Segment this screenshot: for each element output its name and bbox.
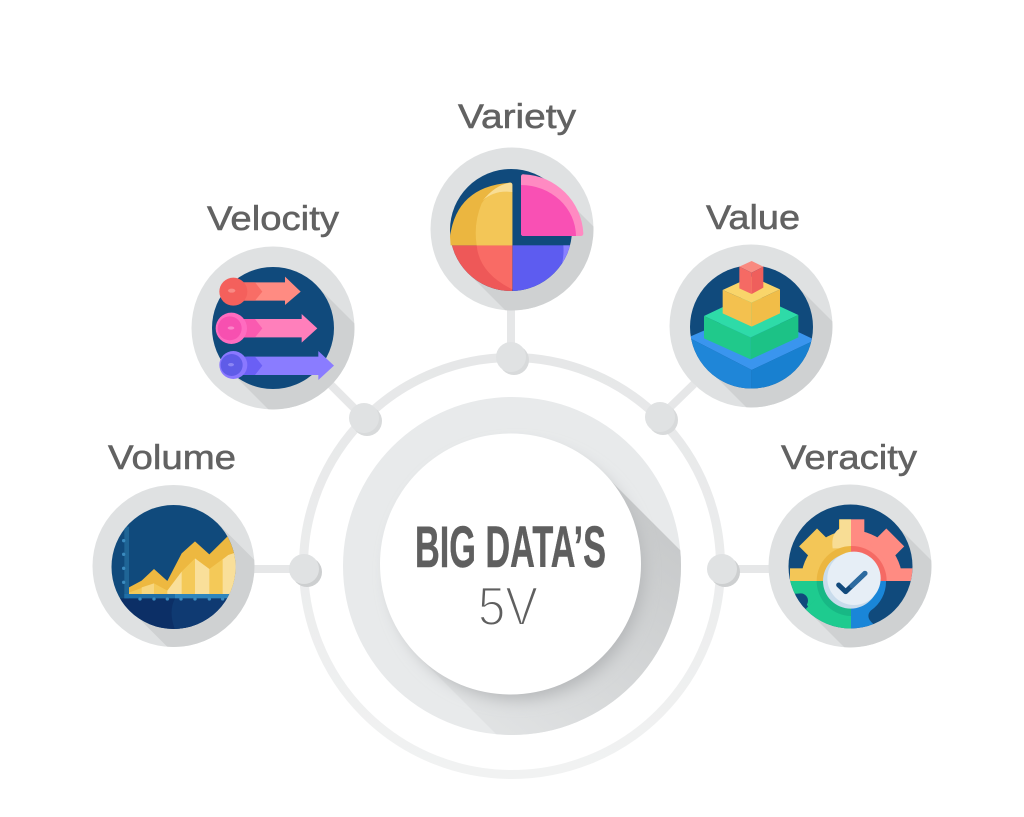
label: Veracity: Veracity	[781, 439, 917, 477]
label: Variety: Variety	[458, 98, 576, 136]
node: value	[645, 402, 678, 435]
node: variety	[496, 342, 529, 375]
icon: variety pie	[430, 148, 594, 310]
label: Velocity: Velocity	[207, 200, 339, 238]
node: velocity	[349, 403, 382, 436]
connectors	[250, 305, 772, 569]
node: veracity	[707, 554, 740, 587]
icon: velocity arrows	[192, 246, 354, 410]
icon: veracity gear and check	[768, 484, 932, 648]
label: Value: Value	[706, 199, 800, 237]
label: Volume: Volume	[108, 439, 236, 477]
infographic: Big Data's 5V	[92, 102, 932, 779]
icon: value pyramid	[670, 244, 832, 408]
outer ring	[304, 358, 720, 774]
node: volume	[289, 554, 322, 587]
title: BIG DATA'S: BIG DATA’S	[415, 515, 606, 580]
central disc	[343, 397, 681, 735]
subtitle: 5V: 5V	[478, 575, 538, 637]
icon: volume area chart	[92, 485, 254, 647]
